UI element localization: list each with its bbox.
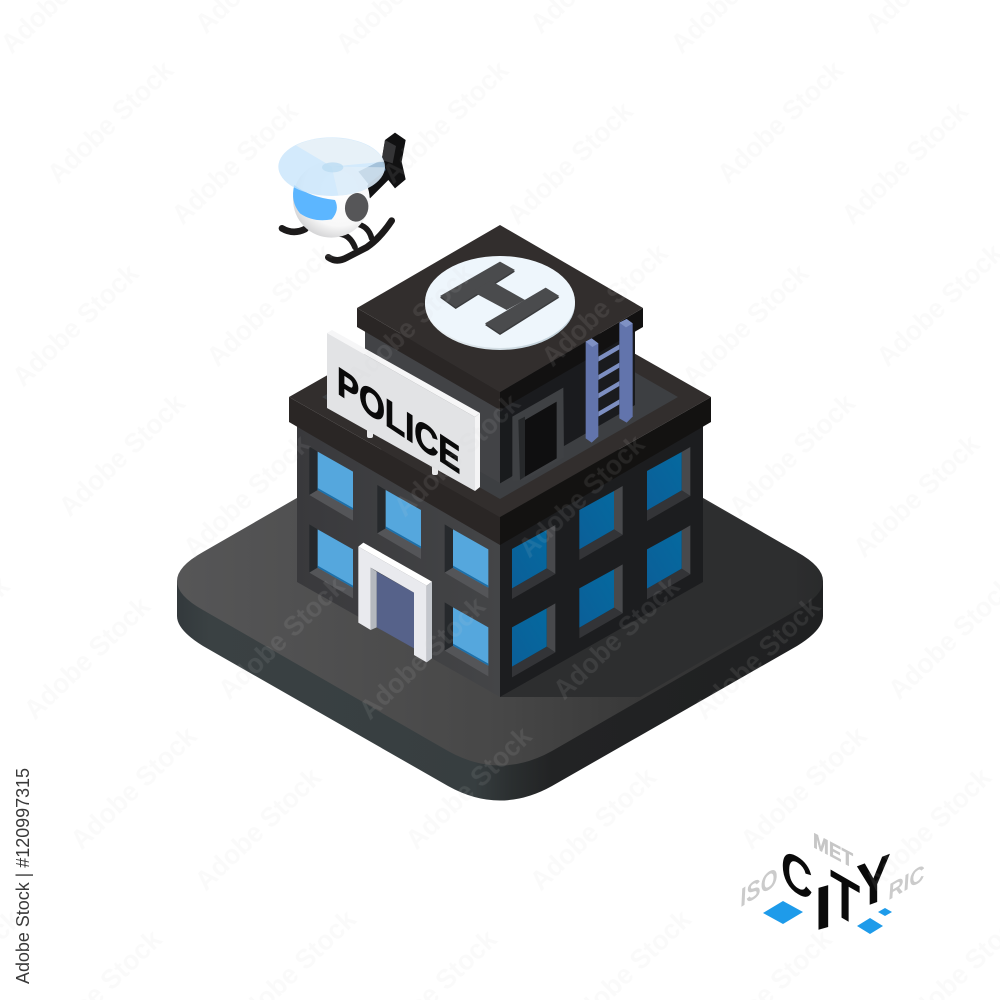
first floor roof slab (289, 277, 711, 545)
tail (358, 133, 406, 198)
upper storey block (365, 330, 635, 483)
platform side (177, 581, 823, 800)
top roof slab (357, 225, 643, 410)
logo letter I: I (814, 871, 833, 944)
logo word RIC: RIC (887, 859, 926, 905)
logo word ISO: ISO (739, 864, 779, 913)
platform base (177, 396, 823, 800)
skid struts (340, 224, 372, 247)
helipad (425, 256, 575, 350)
logo letter C: C (781, 837, 813, 915)
building left face (297, 425, 500, 697)
rotor disc (278, 137, 385, 196)
left skid (282, 228, 305, 232)
logo blue tiles (763, 901, 892, 934)
entrance door (358, 543, 432, 662)
logo word MET: MET (813, 829, 853, 873)
cockpit window (293, 185, 337, 220)
stock id side text: Adobe Stock | #120997315 (12, 768, 33, 984)
left face windows (309, 447, 488, 676)
police sign (327, 330, 480, 491)
fuselage (293, 161, 370, 238)
side window (343, 192, 370, 223)
building ground shadow (500, 500, 797, 697)
sign text POLICE: POLICE (337, 358, 460, 483)
rooftop door (500, 388, 564, 483)
logo letter T: T (830, 857, 860, 942)
right skid (328, 221, 392, 260)
platform top surface (177, 396, 823, 766)
right face windows (512, 447, 690, 677)
ladder (586, 319, 633, 443)
helicopter (278, 133, 406, 260)
logo: isometric city (739, 829, 926, 944)
letter H marking (440, 262, 559, 335)
building right face (500, 425, 703, 697)
logo letter Y: Y (856, 840, 891, 924)
